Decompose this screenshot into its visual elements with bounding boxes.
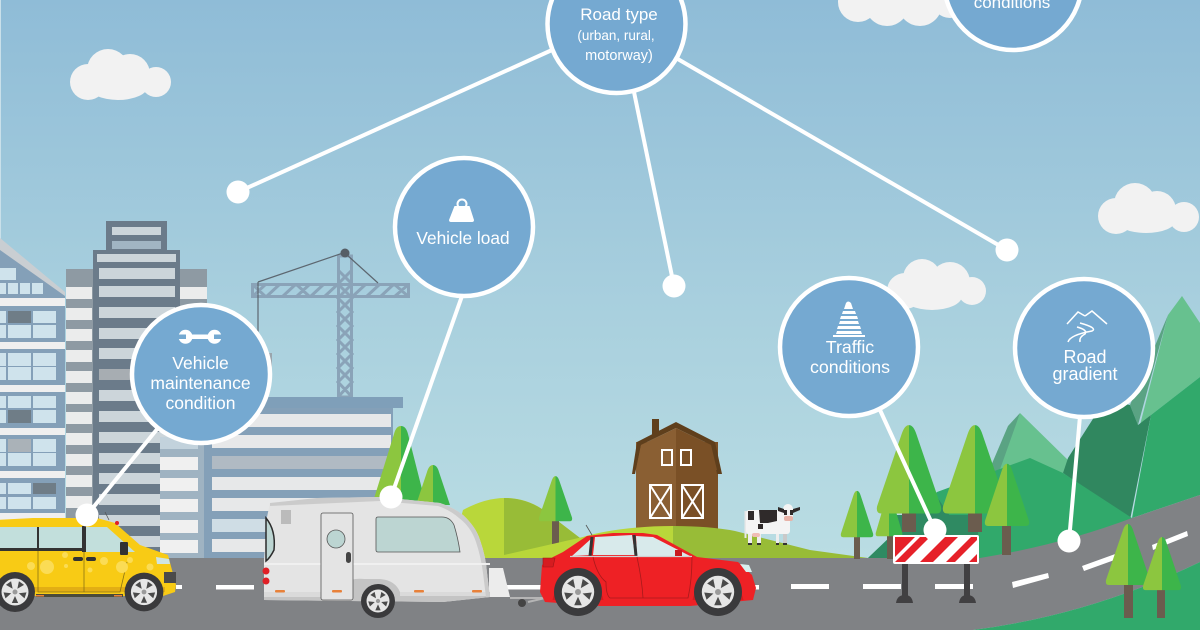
crane <box>252 248 409 397</box>
vehicle load label: Vehicle load <box>416 228 510 248</box>
trees behind caravan <box>372 426 450 505</box>
connector: vehicle load to caravan <box>380 296 462 508</box>
connector: traffic to barrier <box>880 410 946 542</box>
cloud: right <box>1098 183 1199 234</box>
caravan <box>262 497 510 618</box>
tow hitch <box>510 598 545 607</box>
barn <box>632 419 722 530</box>
left apartment building <box>0 238 65 520</box>
front hill <box>504 526 673 558</box>
vehicle maintenance label: Vehicle <box>172 353 229 373</box>
vehicle maintenance second line: maintenance <box>150 373 251 393</box>
foreground trees <box>1106 524 1181 618</box>
badge: road type <box>548 0 686 93</box>
badge: conditions <box>944 0 1082 50</box>
lane dashes <box>176 531 1188 590</box>
cloud: top left <box>70 49 171 100</box>
badge: road gradient <box>1015 279 1153 417</box>
small tree on hill <box>539 476 572 545</box>
gradient second line: gradient <box>1052 364 1118 384</box>
lower right grass <box>973 562 1200 630</box>
cow <box>744 504 800 545</box>
traffic second line: conditions <box>810 357 890 377</box>
low office block <box>160 397 403 558</box>
road type note: (urban, rural, <box>577 28 655 43</box>
badge: traffic conditions <box>780 278 918 416</box>
badge: vehicle load <box>395 158 533 296</box>
connector: road type to left point <box>226 50 552 204</box>
badge: vehicle maintenance <box>132 305 270 443</box>
hills <box>450 498 640 558</box>
road type label: Road type <box>580 5 658 24</box>
road type note second line: motorway) <box>585 48 653 64</box>
roadside trees <box>841 425 1029 559</box>
icon: traffic cone <box>833 302 865 337</box>
connector: road type to right point <box>676 58 1018 262</box>
traffic label: Traffic <box>826 337 874 357</box>
cloud: behind traffic <box>887 259 986 310</box>
icon: weight <box>449 200 474 222</box>
front hill shade <box>673 526 868 558</box>
connector: gradient to road <box>1058 416 1080 552</box>
icon: winding road <box>1067 311 1107 342</box>
cloud: top centre <box>838 0 968 26</box>
yellow van <box>0 512 176 612</box>
connector: road type to centre point <box>634 92 686 298</box>
icon: wrench <box>177 330 223 344</box>
mountains <box>868 296 1200 560</box>
red car <box>540 525 756 616</box>
vehicle maintenance third line: condition <box>165 393 236 413</box>
gradient label: Road <box>1063 347 1107 367</box>
connector: maintenance to van <box>76 428 158 526</box>
road <box>0 495 1200 630</box>
road barrier <box>893 535 979 603</box>
striped tower <box>66 221 272 558</box>
